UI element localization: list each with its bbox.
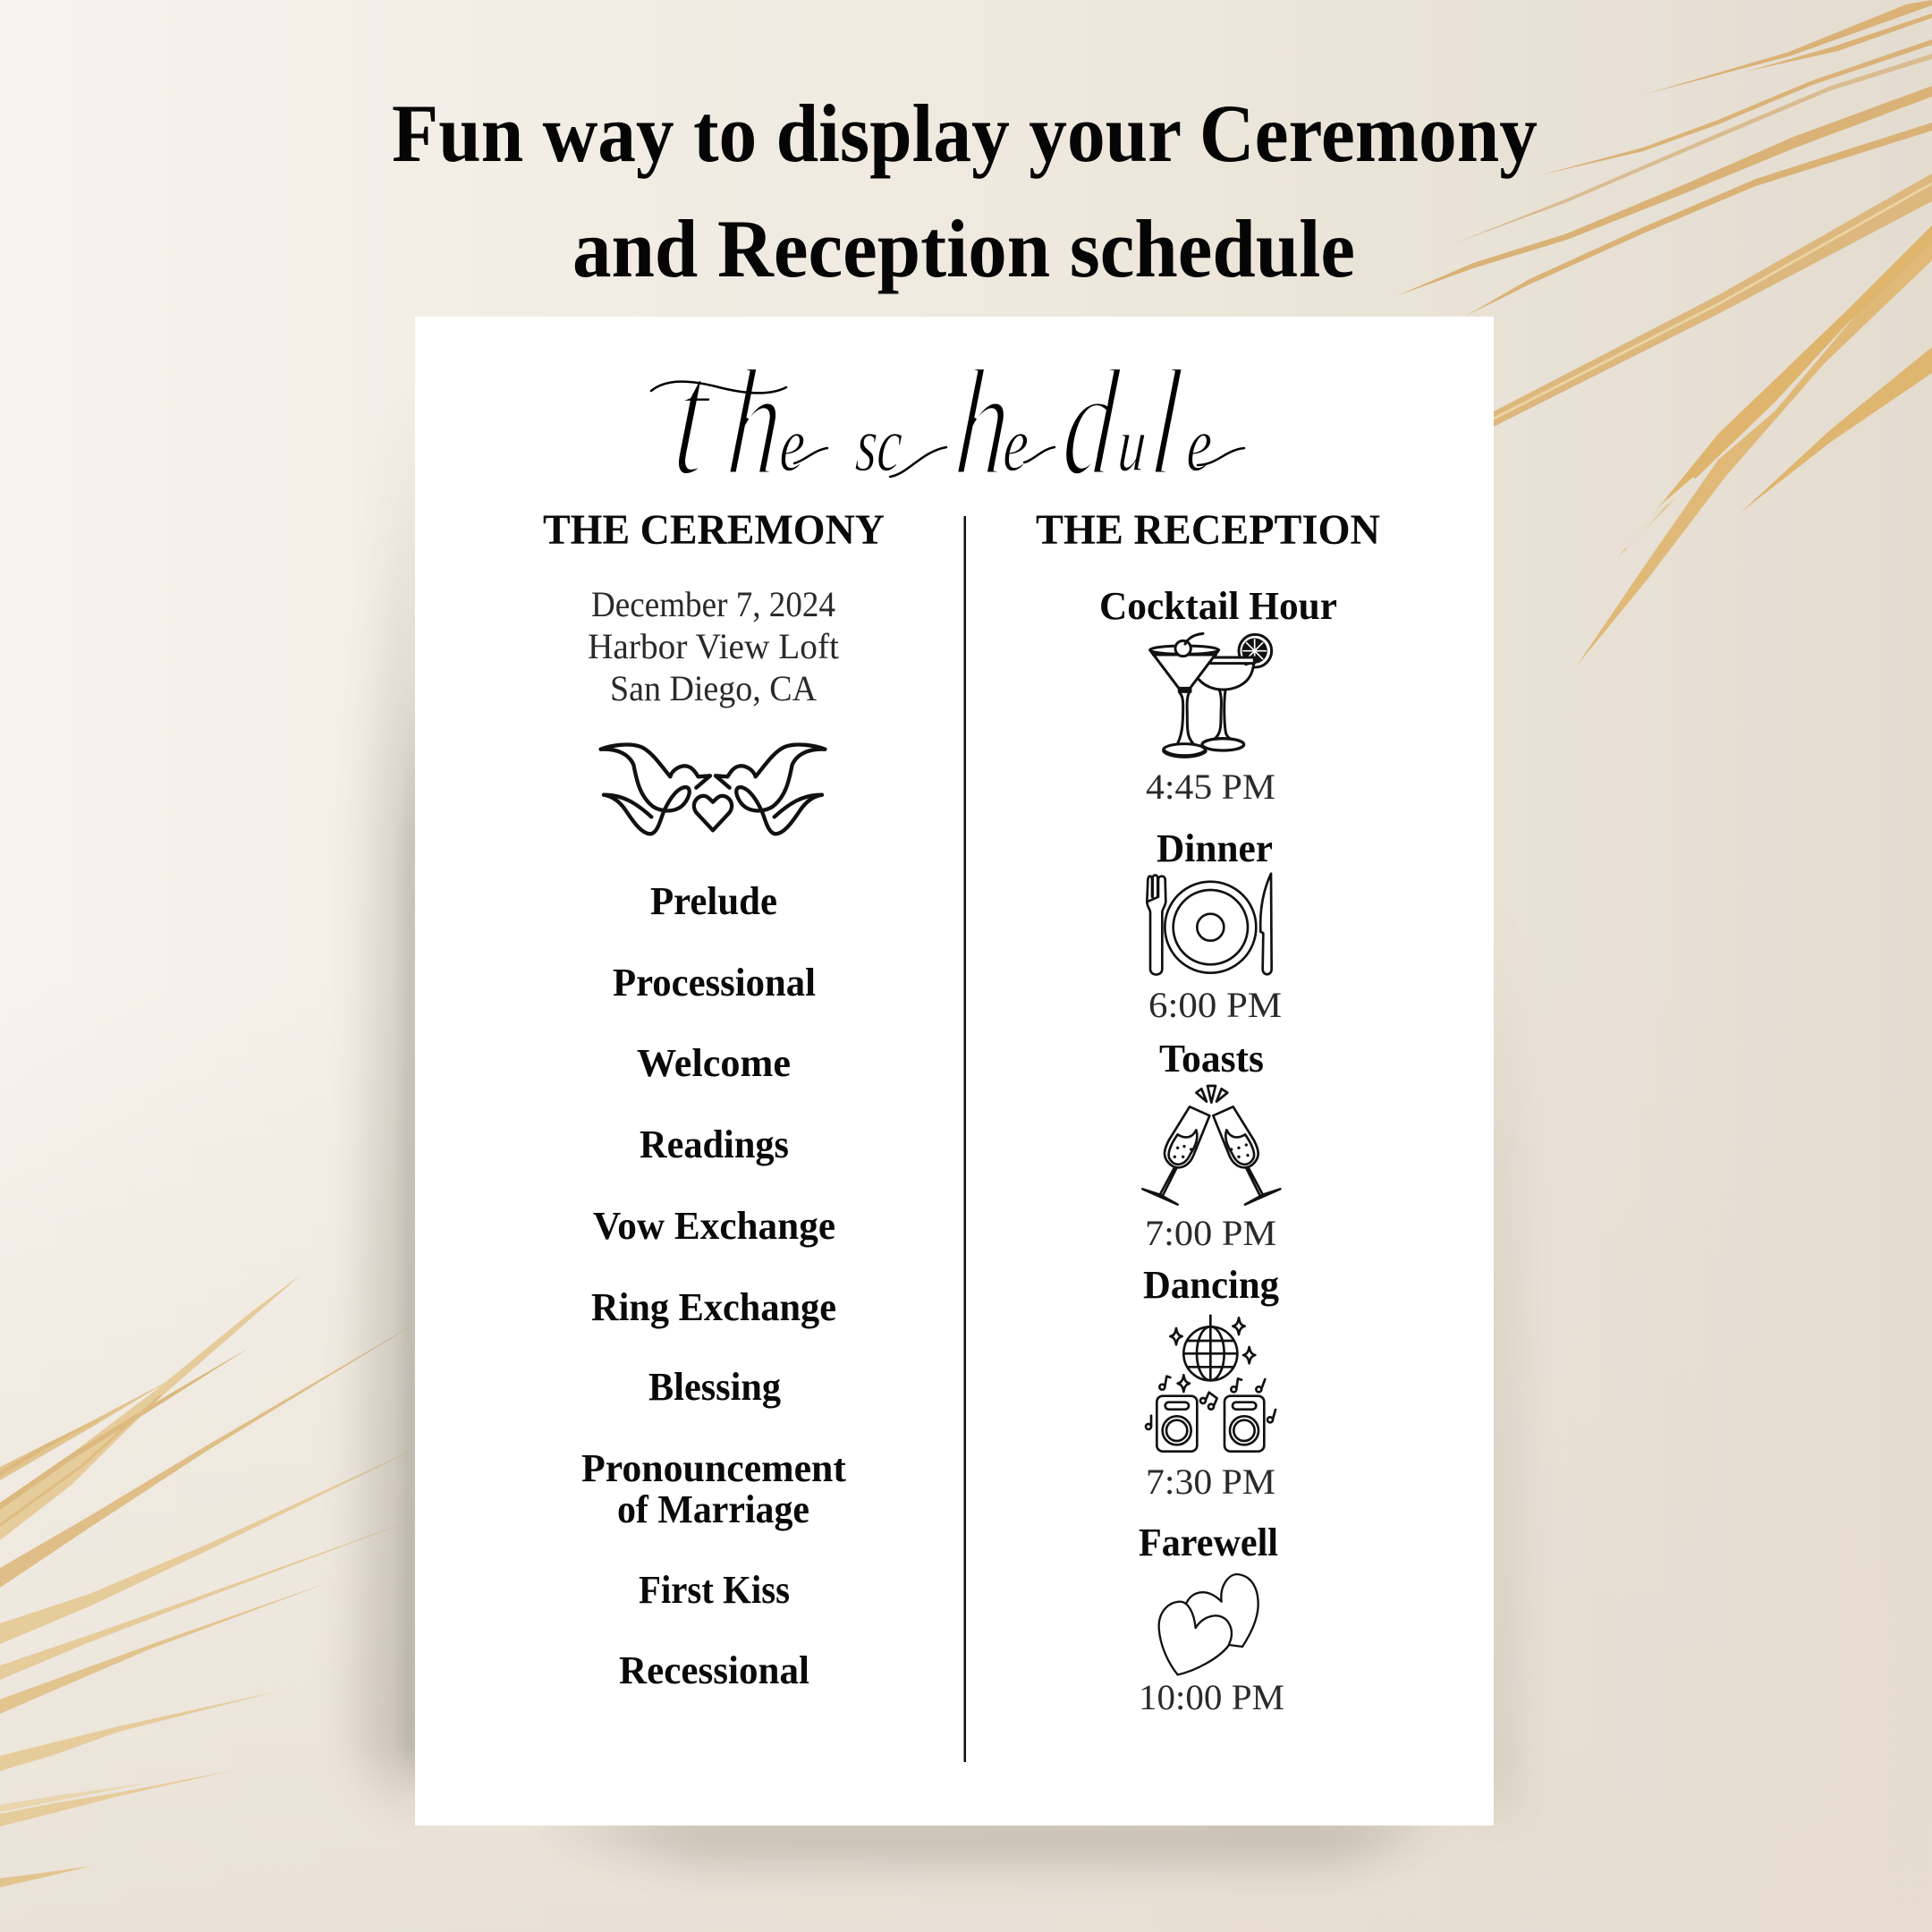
heading: the ceremony: THE CEREMONY — [543, 506, 885, 554]
script heading: d — [1057, 337, 1124, 508]
reception: farewell — [1139, 1521, 1284, 1717]
ceremony order of events: Blessing — [648, 1365, 781, 1409]
reception: dinner: Dinner — [1157, 826, 1273, 870]
reception: farewell: 10:00 PM — [1139, 1677, 1284, 1717]
dried palm leaves: bottom left — [0, 1275, 415, 1887]
icon: two hearts — [1159, 1574, 1258, 1674]
script heading: t — [668, 323, 717, 512]
heading flourishes — [651, 382, 1244, 477]
script heading: e — [1184, 402, 1215, 488]
ceremony order of events: Processional — [613, 961, 816, 1004]
ceremony details: Harbor View Loft — [588, 626, 839, 666]
reception: toasts — [1142, 1037, 1280, 1253]
ceremony order of events: Readings — [640, 1123, 789, 1166]
script heading: l — [1145, 337, 1188, 508]
ceremony order of events: Pronouncement — [581, 1446, 846, 1490]
ceremony order of events: Welcome — [637, 1041, 791, 1085]
column divider — [964, 516, 966, 1762]
script heading: h — [722, 337, 788, 508]
reception: cocktail hour: Cocktail Hour — [1099, 584, 1337, 628]
reception: dinner: 6:00 PM — [1148, 985, 1282, 1025]
panel: schedule card — [415, 317, 1494, 1826]
ceremony order of events: Ring Exchange — [591, 1285, 836, 1329]
reception: cocktail hour: 4:45 PM — [1146, 767, 1275, 807]
ceremony order of events: Prelude — [650, 879, 777, 923]
script heading: e — [1001, 402, 1031, 488]
icon: disco ball and speakers — [1146, 1316, 1275, 1452]
card shadow — [362, 385, 1512, 1856]
ceremony order of events: First Kiss — [639, 1568, 790, 1612]
icon: plate and cutlery — [1147, 874, 1272, 975]
script heading: e — [777, 402, 822, 488]
ceremony details: San Diego, CA — [610, 668, 817, 708]
script heading: sc — [853, 402, 905, 488]
ceremony order of events: of Marriage — [617, 1487, 809, 1531]
script heading: h — [950, 337, 1016, 508]
reception: farewell: Farewell — [1139, 1521, 1278, 1564]
card background — [415, 317, 1494, 1826]
reception: dancing: Dancing — [1143, 1263, 1279, 1307]
title: and Reception schedule — [572, 203, 1355, 294]
ceremony order of events: Vow Exchange — [593, 1204, 835, 1248]
script heading: u — [1115, 402, 1149, 488]
ceremony details: December 7, 2024 — [591, 584, 835, 624]
icon: doves and heart — [601, 744, 825, 834]
icon: cocktails — [1150, 633, 1272, 756]
reception: dancing — [1143, 1263, 1279, 1502]
icon: champagne flutes — [1142, 1086, 1280, 1205]
ceremony details — [588, 584, 839, 708]
reception: toasts: 7:00 PM — [1145, 1213, 1276, 1253]
reception: dancing: 7:30 PM — [1146, 1462, 1275, 1502]
heading: the reception: THE RECEPTION — [1036, 506, 1380, 554]
reception: cocktail hour — [1099, 584, 1337, 807]
ceremony order of events: Recessional — [619, 1648, 809, 1692]
reception: dinner — [1147, 826, 1282, 1025]
reception: toasts: Toasts — [1159, 1037, 1264, 1080]
title: Fun way to display your Ceremony — [392, 88, 1538, 179]
title — [392, 88, 1538, 294]
dried palm leaves: top right — [1396, 0, 1932, 665]
ceremony order of events — [581, 879, 846, 1692]
